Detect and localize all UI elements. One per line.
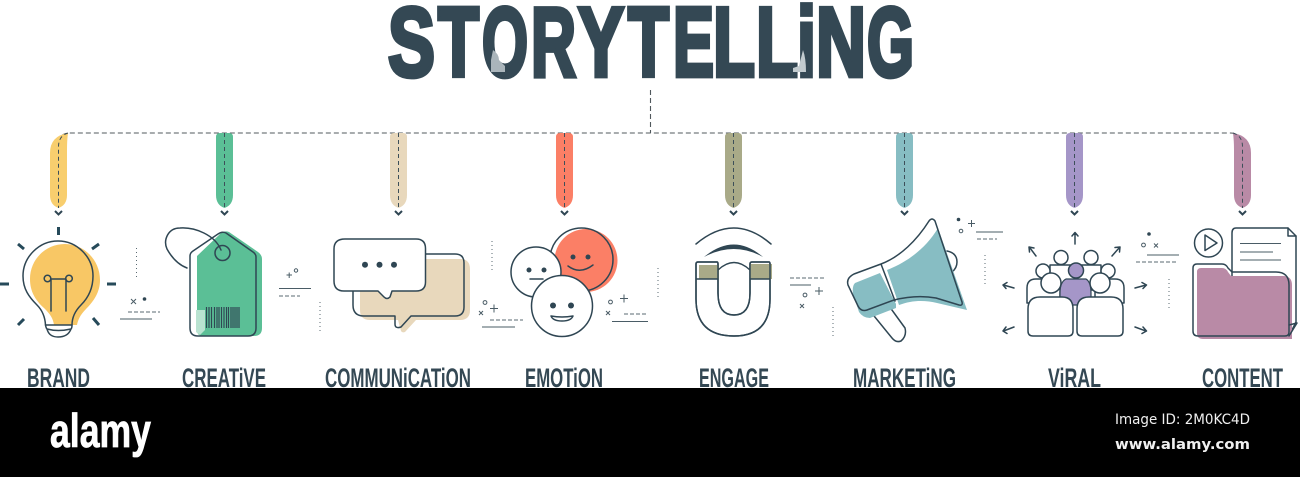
pin: brand (50, 133, 68, 214)
pin: content (1233, 133, 1251, 214)
image id: Image ID: 2M0KC4D (1115, 412, 1250, 428)
connector: dashed tree (58, 90, 1242, 150)
website: www.alamy.com (1115, 437, 1250, 453)
icon: emoji faces (511, 228, 618, 336)
decoration: emotion marks (606, 268, 658, 322)
label: emotion: EMOTiON (525, 363, 603, 393)
decoration: brand marks (120, 248, 160, 319)
decoration: viral marks (1136, 232, 1179, 310)
decoration: creative marks (279, 269, 320, 333)
icon: light bulb (0, 227, 116, 337)
decoration: communication marks (479, 241, 523, 327)
decoration: engage marks (790, 278, 833, 339)
label: engage: ENGAGE (699, 363, 769, 393)
decoration: marketing marks (957, 218, 1003, 287)
logo: alamy: alamy (50, 404, 151, 457)
pin: viral (1066, 133, 1083, 214)
label: brand: BRAND (27, 363, 90, 393)
icon: viral crowd (1003, 232, 1146, 336)
icon: megaphone (848, 219, 967, 342)
label: marketing: MARKETiNG (853, 363, 956, 393)
icon: speech bubbles (334, 239, 470, 332)
pin: engage (725, 133, 742, 214)
pin: marketing (896, 133, 913, 214)
icon: price tag (166, 228, 262, 336)
label: viral: ViRAL (1048, 363, 1101, 393)
watermark patches on title (491, 50, 806, 72)
icon: magnet (696, 228, 772, 336)
label: creative: CREATiVE (182, 363, 266, 393)
label: communication: COMMUNiCATiON (325, 363, 471, 393)
pin: communication (390, 133, 407, 214)
footer bar (0, 388, 1300, 477)
icon: content folder (1193, 228, 1297, 339)
pin: emotion (556, 133, 573, 214)
pin: creative (216, 133, 233, 214)
